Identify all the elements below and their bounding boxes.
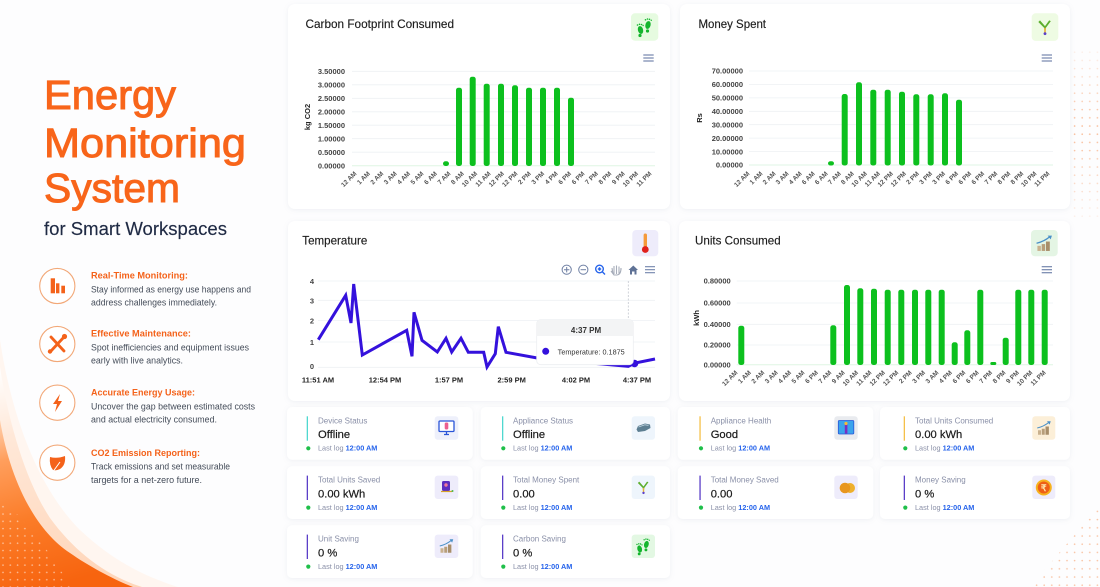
feature: real-time monitoring (40, 268, 251, 308)
icon: rupee coin (1032, 476, 1055, 499)
bar chart: 10 PM (1016, 369, 1034, 388)
panel: units consumed (679, 221, 1070, 401)
bar chart: 3 AM (775, 170, 791, 186)
bar chart: 70.00000 (712, 67, 743, 76)
bar chart: 8 PM (992, 369, 1007, 385)
bar chart: 10 PM (1020, 170, 1038, 189)
bar chart: 12 PM (877, 170, 895, 189)
bar chart (692, 277, 1053, 388)
bar chart: 1.00000 (318, 134, 345, 144)
icon: sprout (632, 476, 655, 499)
bar chart: kg CO2 (303, 104, 312, 130)
card: total units consumed: Last log 12:00 AM (915, 444, 974, 452)
card: total money saved: 0.00 (711, 488, 732, 500)
decorative orange swoosh (0, 340, 178, 587)
bar chart: 4 PM (938, 369, 954, 385)
tooltip (537, 320, 633, 365)
bar chart: 3 AM (383, 170, 399, 186)
bar chart: 6 AM (801, 170, 817, 186)
bar chart: 10.00000 (712, 147, 743, 156)
feature: co2 emission reporting: CO2 Emission Reporting: (91, 448, 200, 459)
card: unit saving: 0 % (318, 547, 337, 559)
chart toolbar (562, 265, 655, 275)
bar chart: 4 PM (544, 170, 560, 186)
bar chart: 6 PM (557, 170, 573, 186)
bar chart: 11 PM (1033, 170, 1051, 188)
card: carbon saving (481, 525, 670, 578)
card: total money spent: Last log 12:00 AM (513, 503, 572, 512)
card: total money saved (678, 466, 873, 519)
icon: tools (40, 326, 75, 362)
card: money saving (880, 466, 1070, 519)
bar chart: 8 PM (598, 170, 613, 186)
icon: footprints (631, 13, 658, 41)
line chart: 4 (310, 277, 315, 286)
feature: accurate energy usage: and actual electricity consumed. (91, 414, 217, 424)
card: money saving: 0 % (915, 488, 934, 500)
bar chart: 3 PM (911, 369, 927, 385)
decorative dots right (1036, 52, 1098, 586)
menu icon (643, 55, 654, 61)
bar chart: 6 AM (423, 170, 439, 186)
card: money saving: Money Saving (915, 476, 966, 485)
heading: Temperature (302, 234, 368, 248)
icon: sprout (1032, 13, 1058, 41)
bar chart: 3 PM (931, 170, 947, 186)
card: appliance status: Appliance Status (513, 416, 573, 425)
feature: co2 emission reporting (40, 445, 230, 485)
icon: units saved (435, 476, 458, 499)
line chart: 12:54 PM (369, 376, 401, 384)
card: appliance status (481, 407, 670, 460)
bar chart: 6 PM (944, 170, 960, 186)
card: appliance health: Appliance Health (711, 416, 771, 425)
card: total units saved: 0.00 kWh (318, 488, 365, 500)
icon: leaf (40, 445, 75, 480)
menu icon (1042, 267, 1052, 273)
bar chart (695, 67, 1053, 189)
card: unit saving: Unit Saving (318, 535, 359, 544)
bar chart: 7 PM (584, 170, 600, 186)
card: total units saved (287, 466, 473, 519)
bar chart: 12 PM (890, 170, 908, 189)
bar chart: 7 AM (827, 170, 843, 186)
bar chart (303, 67, 655, 189)
bar chart: 6 PM (970, 170, 986, 186)
icon: appliance (632, 416, 655, 440)
bar chart: 8 AM (450, 170, 466, 186)
title: Monitoring (44, 120, 246, 166)
bar chart: 11 PM (635, 170, 653, 188)
bar chart: 7 PM (978, 369, 994, 385)
bar chart: 1 AM (749, 170, 764, 186)
bar chart: 8 PM (997, 170, 1012, 186)
heading: Units Consumed (695, 234, 781, 248)
card: total units consumed (880, 407, 1070, 460)
bar chart: 3.00000 (318, 80, 345, 90)
card: unit saving: Last log 12:00 AM (318, 562, 377, 571)
feature: real-time monitoring: Stay informed as energy use happens and (91, 284, 251, 294)
feature: effective maintenance (40, 326, 250, 366)
bar chart: 8 AM (840, 170, 856, 186)
bar chart: 30.00000 (712, 120, 743, 129)
card: appliance status: Last log 12:00 AM (513, 444, 572, 452)
card: device status: Device Status (318, 416, 367, 425)
bar chart: 9 PM (611, 170, 627, 186)
icon: health screen (834, 416, 858, 440)
panel: temperature (288, 221, 670, 401)
bar chart: 3 AM (764, 369, 780, 385)
panel: money spent (680, 4, 1070, 209)
bar chart: 8 PM (1010, 170, 1025, 186)
icon: thermometer (632, 230, 658, 256)
bar chart: 2 AM (750, 369, 766, 385)
bar chart: 11 AM (864, 170, 882, 189)
bar chart: 0.40000 (704, 320, 731, 329)
bar chart: 2.00000 (318, 108, 345, 116)
card: total money spent: Total Money Spent (513, 476, 580, 485)
card: total units saved: Last log 12:00 AM (318, 503, 377, 512)
bar chart: 12 AM (721, 369, 739, 388)
bar chart: 12 PM (488, 170, 506, 189)
bar chart: 9 AM (831, 369, 847, 385)
card: total money spent: 0.00 (513, 488, 535, 500)
bar chart: 0.00000 (318, 162, 345, 170)
line chart: 2:59 PM (498, 376, 526, 384)
icon: growth chart (435, 535, 458, 558)
bar chart: 6 PM (965, 369, 981, 385)
card: total units saved: Total Units Saved (318, 476, 380, 485)
line chart: 4:37 PM (623, 376, 651, 384)
bar chart: 3 PM (530, 170, 546, 186)
bar chart: 9 PM (1005, 369, 1021, 385)
icon: monitor (435, 416, 458, 440)
bar chart: 3 AM (925, 369, 940, 385)
bar chart: 20.00000 (712, 134, 743, 143)
feature: accurate energy usage (40, 385, 256, 424)
bar chart: 7 AM (817, 369, 833, 385)
feature: real-time monitoring: address challenges immediately. (91, 298, 217, 308)
card: device status: Offline (318, 429, 350, 441)
bar chart: 10 AM (842, 369, 860, 388)
icon: rupee coin: ₹ (1041, 483, 1047, 493)
line chart: 2 (310, 316, 314, 326)
bar chart: 2 PM (905, 170, 921, 186)
card: appliance health: Good (711, 429, 738, 441)
feature: effective maintenance: Spot inefficiencies and equipment issues (91, 342, 250, 352)
bar chart: 7 AM (437, 170, 452, 186)
heading: Carbon Footprint Consumed (306, 17, 454, 31)
card: total units consumed: 0.00 kWh (915, 429, 962, 441)
card: appliance health (678, 407, 873, 460)
bar chart: 11 AM (855, 369, 873, 388)
bar chart: 12 PM (869, 369, 887, 388)
tooltip: 4:37 PM (571, 326, 601, 335)
panel: carbon footprint consumed (288, 4, 670, 209)
bar chart: 6 AM (814, 170, 830, 186)
card: device status: Last log 12:00 AM (318, 444, 377, 452)
bar chart: 60.00000 (712, 80, 743, 89)
bar chart: 10 AM (850, 170, 869, 189)
card: device status (287, 407, 473, 460)
bar chart: 50.00000 (712, 94, 743, 103)
card: carbon saving: 0 % (513, 547, 532, 559)
line chart: 0 (310, 362, 314, 371)
title (44, 72, 246, 211)
bar chart: 10 AM (461, 170, 479, 189)
bar chart: 2 PM (517, 170, 533, 186)
bar chart: 12 AM (733, 170, 751, 189)
feature: real-time monitoring: Real-Time Monitoring: (91, 270, 188, 282)
bar chart: 0.00000 (716, 161, 743, 170)
bar chart: 1.50000 (318, 121, 345, 130)
bar chart: kWh (692, 310, 701, 326)
feature: accurate energy usage: Accurate Energy Usage: (91, 388, 195, 399)
bar chart: 1 AM (356, 170, 372, 186)
bar chart: 3.50000 (318, 67, 345, 76)
bar chart: 4 AM (396, 170, 412, 186)
line chart: 1:57 PM (435, 376, 463, 384)
bar chart: 0.80000 (704, 277, 731, 286)
line chart (302, 277, 655, 384)
card: unit saving (287, 525, 473, 578)
bar chart: 6 PM (957, 170, 973, 186)
card: total money saved: Total Money Saved (711, 476, 779, 485)
bar chart: 5 AM (791, 369, 806, 385)
bar chart: 0.50000 (318, 148, 345, 157)
tooltip: Temperature: 0.1875 (558, 347, 625, 356)
bar chart: Rs (695, 113, 704, 123)
feature: co2 emission reporting: Track emissions and set measurable (91, 462, 230, 472)
icon: coins (834, 476, 858, 499)
heading: Money Spent (698, 17, 767, 31)
bar chart: 4 AM (777, 369, 793, 385)
card: carbon saving: Carbon Saving (513, 535, 566, 544)
bar chart: 2 AM (369, 170, 385, 186)
feature: co2 emission reporting: targets for a net-zero future. (91, 475, 202, 485)
bar chart: 6 PM (952, 369, 967, 385)
bar chart: 2 AM (762, 170, 778, 186)
card: appliance status: Offline (513, 429, 545, 441)
card: appliance health: Last log 12:00 AM (711, 444, 770, 452)
card: total money saved: Last log 12:00 AM (711, 503, 770, 512)
bar chart: 0.20000 (704, 341, 731, 350)
bar chart: 10 PM (622, 170, 640, 189)
bar chart: 40.00000 (712, 107, 743, 116)
bar chart: 11 AM (474, 170, 493, 189)
bar chart: 0.60000 (704, 299, 731, 308)
line chart: 11:51 AM (302, 376, 334, 384)
bar chart: 3 PM (918, 170, 934, 186)
icon: growth chart (1031, 230, 1058, 256)
bar chart: 12 AM (340, 170, 358, 189)
icon: footprints (632, 535, 655, 558)
bar chart: 2 PM (898, 369, 914, 385)
feature: effective maintenance: Effective Maintenance: (91, 329, 191, 340)
icon: growth chart (1032, 416, 1055, 440)
bar chart: 4 AM (788, 170, 804, 186)
card: carbon saving: Last log 12:00 AM (513, 562, 572, 571)
bar chart: 0.00000 (704, 360, 731, 369)
bar chart: 12 PM (882, 369, 900, 388)
icon: bars (40, 268, 75, 304)
line chart: 1 (310, 338, 314, 347)
bar chart: 1 AM (737, 369, 753, 385)
line chart: 4:02 PM (562, 376, 590, 384)
title: Energy (44, 72, 176, 118)
line chart: 3 (310, 296, 314, 305)
subtitle: for Smart Workspaces (44, 219, 227, 239)
bar chart: 11 PM (1030, 369, 1048, 387)
bar chart: 7 PM (984, 170, 999, 186)
title: System (44, 165, 180, 211)
feature: effective maintenance: early with live analytics. (91, 356, 183, 366)
feature: accurate energy usage: Uncover the gap between estimated costs (91, 402, 256, 412)
bar chart: 5 AM (410, 170, 425, 186)
card: total money spent (481, 466, 670, 519)
bar chart: 6 PM (571, 170, 586, 186)
icon: bolt (40, 385, 75, 420)
bar chart: 6 PM (804, 369, 820, 385)
bar chart: 12 PM (501, 170, 519, 189)
bar chart: 2.50000 (318, 94, 345, 103)
card: money saving: Last log 12:00 AM (915, 503, 974, 512)
card: total units consumed: Total Units Consumed (915, 416, 993, 425)
menu icon (1042, 55, 1052, 61)
